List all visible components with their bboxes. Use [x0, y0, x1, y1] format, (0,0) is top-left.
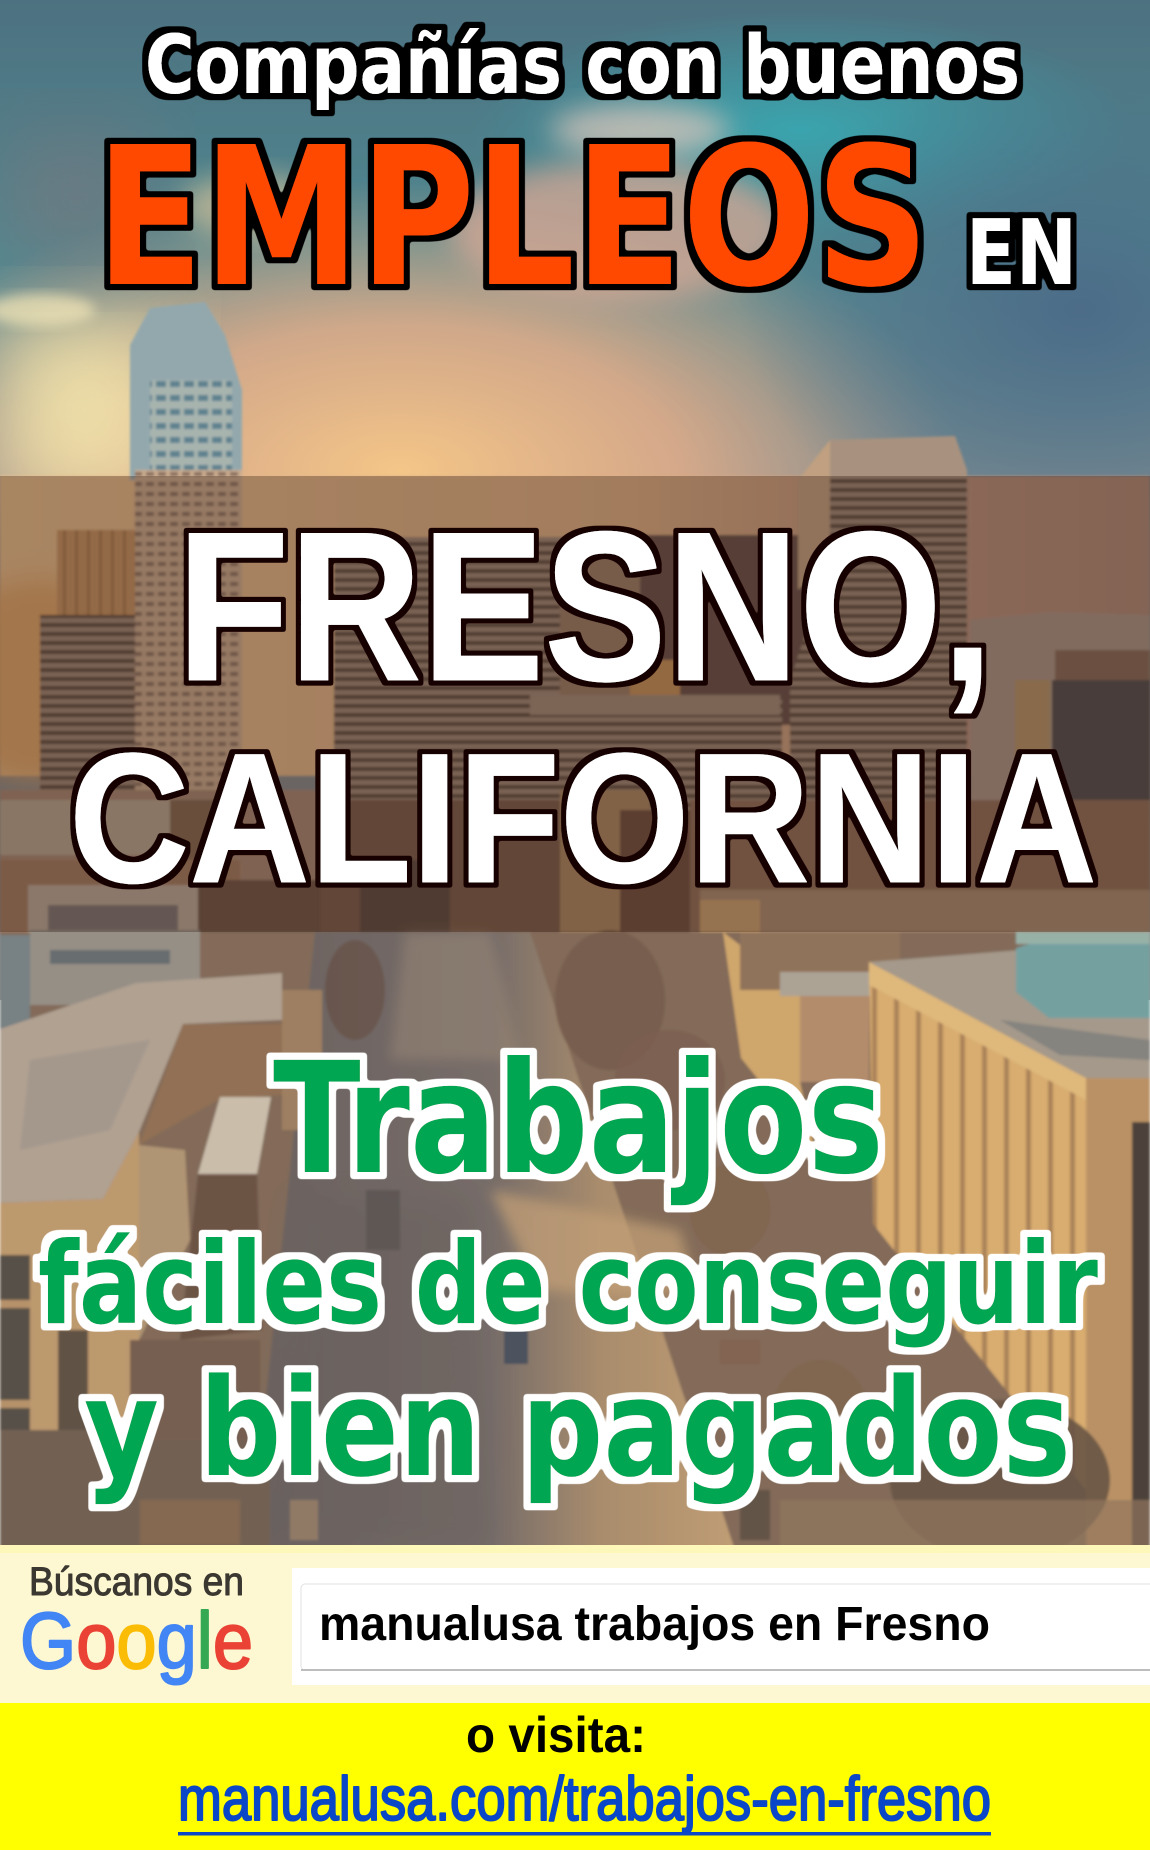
translucent band behind city name [0, 476, 1150, 932]
distant hills [970, 612, 1150, 860]
brown wall [139, 1024, 282, 1145]
background: sky [0, 0, 1150, 1000]
left short buildings [57, 530, 135, 615]
left large building roof [0, 973, 282, 1203]
label: Búscanos en: Búscanos en [29, 1560, 244, 1604]
street trees [555, 930, 665, 1070]
road [250, 932, 735, 1550]
lower left dark [0, 1430, 270, 1550]
cars [366, 1190, 400, 1250]
background: city skyline and street [0, 302, 1150, 1560]
left grey building [30, 930, 200, 1005]
title: EN: EN [966, 201, 1077, 306]
right tower [798, 436, 967, 500]
subheading: Trabajos: Trabajos [273, 1030, 884, 1209]
ground [0, 932, 1150, 1552]
link underline [178, 1832, 991, 1836]
logo: Google: Google [20, 1596, 253, 1685]
link: website url: manualusa.com/trabajos-en-fresno [178, 1765, 991, 1834]
heading: FRESNO,: FRESNO, [177, 488, 993, 726]
panel: Google search strip [0, 1545, 1150, 1703]
warm sky behind band [0, 476, 1150, 776]
mid city [0, 790, 340, 940]
right roof [869, 950, 1150, 1078]
right block [1055, 650, 1150, 680]
mid right building [723, 932, 815, 1150]
left building face [0, 1132, 139, 1440]
title: EMPLEOS: EMPLEOS [96, 107, 929, 330]
teal penthouse [1016, 935, 1150, 1018]
panel: yellow visit footer [0, 1703, 1150, 1850]
search box [301, 1584, 1150, 1671]
right large building face [869, 962, 1086, 1490]
text: o visita: o visita: [466, 1707, 646, 1763]
left tower [130, 302, 242, 480]
small roof [139, 1145, 190, 1340]
search query text: manualusa trabajos en Fresno [319, 1598, 990, 1651]
soft light on lower section [0, 932, 1150, 1545]
low centre block [334, 537, 564, 867]
